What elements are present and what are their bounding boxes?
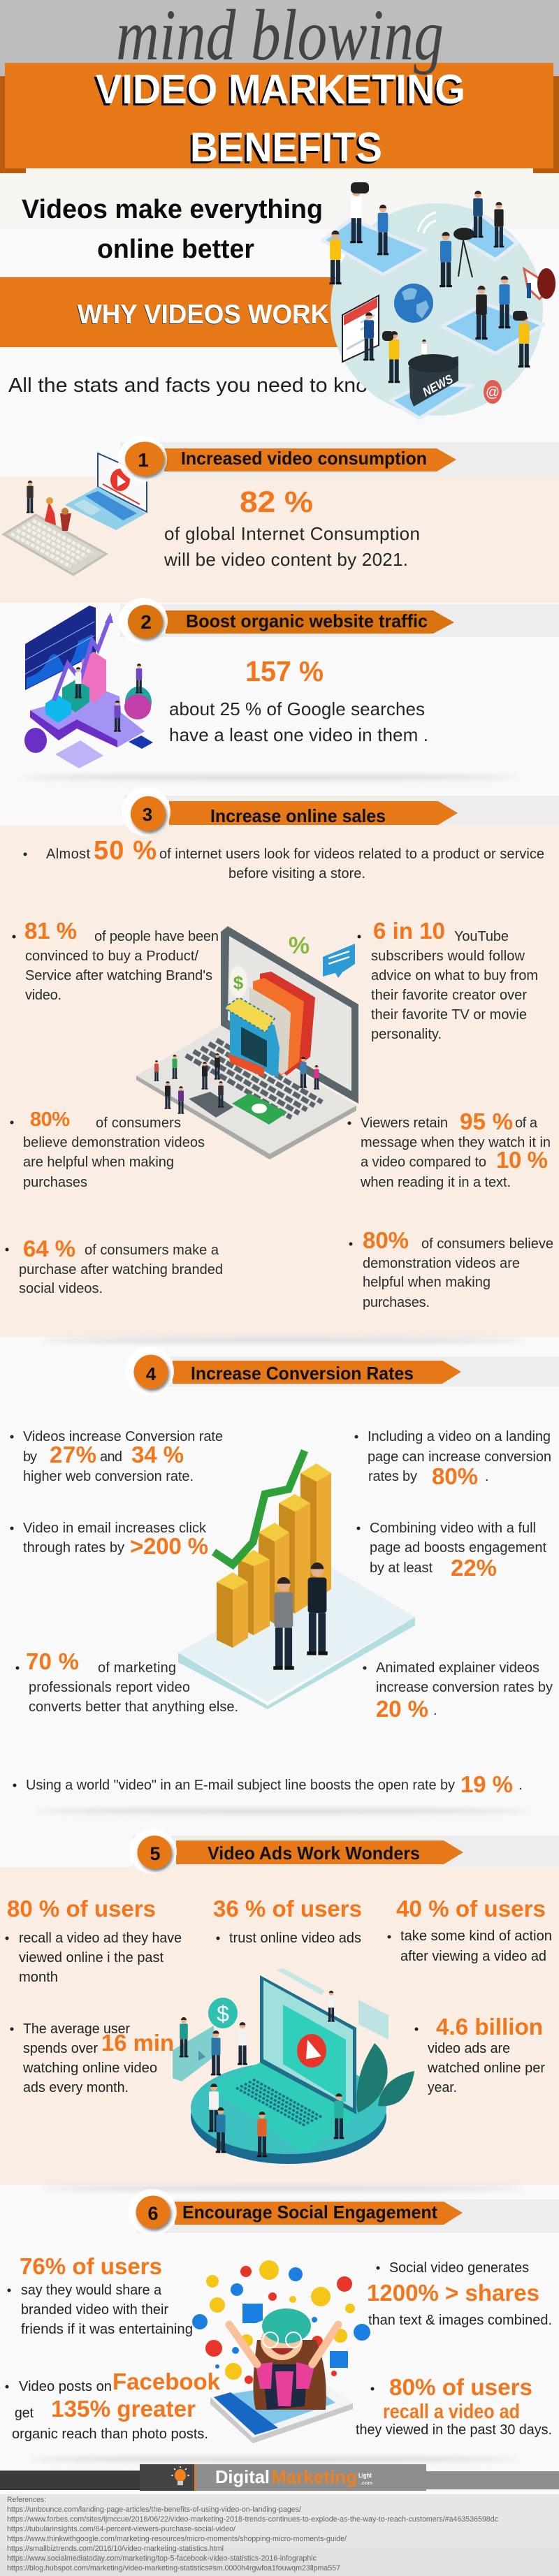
text: 16 min: watching online video (22, 2061, 157, 2076)
logo wordmark: Digital (215, 2466, 270, 2487)
text left column: >200 % (130, 1533, 208, 1559)
panel: section 3 online sales (0, 787, 559, 1342)
text: 95 percent: message when they watch it in (361, 1135, 551, 1150)
logo wordmark: Light (358, 2472, 372, 2479)
shoppers (154, 1053, 319, 1114)
tablets (323, 213, 544, 418)
stat columns: viewed online i the past (19, 1950, 164, 1966)
text: 80 percent left: purchases (23, 1175, 87, 1190)
icon: at sign (484, 380, 502, 404)
main title: BENEFITS (188, 126, 380, 173)
text left column: and (100, 1449, 122, 1465)
references: https://www.thinkwithgoogle.com/marketing-resources/micro-moments/shopping-micro-moments-guide/ (7, 2535, 347, 2543)
people (329, 183, 530, 383)
text: 64 percent: social videos. (19, 1281, 103, 1296)
references (0, 2494, 559, 2576)
stat: 82 % (240, 485, 313, 519)
text right column: . (485, 1469, 489, 1484)
icon: megaphone (524, 268, 556, 299)
references: https://www.socialmediatoday.com/marketing/top-5-facebook-video-statistics-2016-infographic (7, 2554, 317, 2563)
text: 6 in 10: subscribers would follow (371, 949, 525, 964)
illustration: news media globe (323, 183, 556, 418)
header banner (0, 0, 559, 229)
icon: play button (297, 2034, 326, 2068)
text: 80 percent left: of consumers (96, 1115, 181, 1131)
main title (94, 66, 465, 173)
section header: Increase Conversion Rates (191, 1363, 414, 1384)
text: 19 percent: 19 % (460, 1771, 513, 1797)
text: 20 percent: 20 % (376, 1696, 428, 1722)
section header (122, 787, 458, 836)
panel: section 2 organic traffic (21, 598, 559, 780)
text left column: higher web conversion rate. (23, 1469, 194, 1484)
text: 4.6 billion: video ads are (428, 2041, 510, 2056)
panel: section 6 social engagement (6, 2189, 559, 2461)
references: https://www.forbes.com/sites/tjmccue/2018/06/22/video-marketing-2018-trends-continues-to-explode-as-the-way-to-reach-customers/#a463536598dc (7, 2515, 498, 2524)
section header (118, 436, 456, 482)
text: 80 percent recall: recall a video ad (383, 2401, 520, 2423)
icon: money (232, 1093, 287, 1125)
text: 50 percent: of internet users look for videos related to a product or service (159, 847, 544, 862)
text: 76 percent: friends if it was entertaining (21, 2322, 193, 2337)
why videos work band: WHY VIDEOS WORK (77, 300, 329, 330)
logo wordmark: .com (361, 2481, 372, 2486)
text: 64 percent: 64 % (23, 1236, 75, 1261)
stat (169, 655, 428, 745)
section header: 4 (146, 1363, 157, 1384)
section header (125, 1347, 461, 1396)
text: 4.6 billion: year. (428, 2080, 457, 2095)
phone (210, 2377, 353, 2443)
subheading (22, 195, 323, 264)
text: 6 in 10: their favorite TV or movie (371, 1007, 527, 1023)
stat: will be video content by 2021. (164, 549, 408, 570)
text: 19 percent: Using a world "video" in an E-mail subject line boosts the open rate by (26, 1778, 455, 1793)
illustration: bar chart with people (178, 1451, 415, 1709)
text left column: by (23, 1449, 37, 1465)
section header: 5 (150, 1843, 161, 1864)
text left column (10, 1429, 223, 1559)
text: 81 percent: Service after watching Brand's (25, 968, 212, 983)
stat columns: after viewing a video ad (400, 1949, 546, 1964)
logo wordmark (215, 2466, 372, 2487)
icon: dollar coin: $ (233, 972, 244, 993)
plant (356, 2043, 414, 2113)
subheading: Videos make everything (22, 195, 323, 224)
stat columns: 36 % of users (213, 1896, 362, 1922)
section header: Boost organic website traffic (186, 610, 428, 631)
text right column (355, 1429, 551, 1581)
text right column: Combining video with a full (370, 1521, 536, 1536)
text right column: page can increase conversion (368, 1449, 551, 1465)
text: 80 percent left: 80% (30, 1108, 70, 1131)
text: Facebook: organic reach than photo posts. (12, 2427, 208, 2442)
text: 1200 percent: Social video generates (389, 2260, 529, 2276)
text: 70 percent (15, 1648, 238, 1715)
stat columns: 40 % of users (396, 1896, 546, 1922)
text: 76 percent: say they would share a (21, 2283, 162, 2298)
text: 20 percent (363, 1660, 553, 1722)
girl (229, 2308, 338, 2410)
news desk: NEWS (420, 372, 455, 400)
text: 16 min: spends over (23, 2041, 98, 2056)
text: 80 percent left: believe demonstration videos (23, 1135, 205, 1150)
section header: Encourage Social Engagement (182, 2202, 437, 2223)
text left column: 34 % (131, 1442, 184, 1468)
text: 80 percent right: purchases. (363, 1295, 430, 1310)
section header: Increased video consumption (181, 448, 427, 469)
text left column: Videos increase Conversion rate (23, 1429, 223, 1444)
section header: 6 (147, 2203, 159, 2224)
text: 80 percent recall: 80% of users (389, 2374, 532, 2400)
text: 16 min: ads every month. (23, 2080, 129, 2095)
text: 64 percent (6, 1236, 223, 1296)
illustration: girl with social reactions (192, 2260, 370, 2443)
text: 19 percent: . (518, 1778, 523, 1793)
section header: 2 (140, 611, 152, 633)
text: 80 percent recall (356, 2374, 552, 2438)
text right column: 80% (432, 1463, 478, 1489)
text: 20 percent: . (433, 1703, 437, 1718)
icon: at sign: @ (486, 385, 500, 400)
text right column: 22% (451, 1555, 497, 1581)
text: 6 in 10: their favorite creator over (371, 988, 527, 1003)
logo wordmark: Marketing (271, 2466, 357, 2487)
text: 76 percent: 76% of users (20, 2253, 162, 2279)
references: https://tubularinsights.com/64-percent-viewers-purchase-social-video/ (7, 2525, 236, 2533)
stat columns: month (19, 1970, 58, 1985)
stat (164, 485, 420, 570)
references: https://smallbiztrends.com/2016/10/video-marketing-statistics.html (7, 2545, 224, 2553)
tagline: All the stats and facts you need to know (8, 374, 384, 397)
why videos work band: WHY VIDEOS WORK (78, 300, 329, 330)
text: Facebook: Video posts on (19, 2379, 112, 2394)
text left column: Video in email increases click (23, 1521, 207, 1536)
main title: VIDEO MARKETING (94, 68, 463, 115)
main title: BENEFITS (190, 124, 382, 170)
text: 6 in 10: personality. (371, 1027, 442, 1042)
text: 16 min: 16 min (101, 2030, 174, 2056)
text: 76 percent (7, 2253, 193, 2337)
icon: dollar circle: $ (217, 2001, 229, 2026)
green trend arrow (214, 1451, 305, 1565)
illustration: purple growth chart (24, 606, 153, 768)
text: 81 percent: convinced to buy a Product/ (25, 949, 198, 964)
text: 20 percent: Animated explainer videos (376, 1660, 539, 1676)
text: 76 percent: branded video with their (21, 2302, 168, 2318)
illustration: teal laptop (173, 1968, 414, 2164)
books and shop (224, 972, 315, 1078)
text: 6 in 10: advice on what to buy from (371, 968, 538, 983)
stat columns: trust online video ads (229, 1931, 361, 1946)
stat: have a least one video in them . (169, 724, 428, 745)
text right column: Including a video on a landing (368, 1429, 551, 1444)
text: 70 percent: 70 % (26, 1648, 79, 1674)
icon: dollar coin (229, 966, 247, 998)
section header: Increase online sales (210, 805, 386, 826)
text: 81 percent: video. (25, 988, 61, 1003)
text right column: rates by (368, 1469, 417, 1484)
people (180, 1991, 344, 2157)
main title: VIDEO MARKETING (96, 66, 465, 112)
text: 4.6 billion (415, 2014, 545, 2095)
text: 64 percent: purchase after watching branded (19, 1262, 223, 1278)
text: 1200 percent: than text & images combined. (368, 2313, 552, 2328)
text: 6 in 10: 6 in 10 (373, 918, 445, 944)
text: 6 in 10: YouTube (454, 929, 509, 944)
text: Facebook: get (15, 2406, 34, 2421)
stat columns: 80 % of users (7, 1896, 156, 1922)
stat columns: recall a video ad they have (19, 1931, 182, 1946)
text: 95 percent: 95 % (460, 1108, 513, 1134)
text: 19 percent (13, 1771, 523, 1797)
video cards (173, 2000, 389, 2081)
references: https://blog.hubspot.com/marketing/video-marketing-statistics#sm.0000h4rgwfoa1fouwqm23llpma557 (7, 2564, 340, 2573)
text: 4.6 billion: 4.6 billion (436, 2014, 543, 2040)
subheading: online better (97, 235, 254, 264)
text: 50 percent: before visiting a store. (228, 866, 365, 881)
icon: dollar circle (208, 1998, 238, 2028)
stat columns: take some kind of action (400, 1929, 552, 1944)
text right column: page ad boosts engagement (370, 1540, 546, 1556)
text: 95 percent: Viewers retain (361, 1115, 448, 1131)
text: 50 percent: 50 % (94, 836, 157, 865)
text: 80 percent left (10, 1108, 205, 1190)
businesspeople (273, 1577, 294, 1670)
section header (129, 1829, 463, 1874)
text: 81 percent: of people have been (94, 929, 219, 944)
illustration: laptop and keyboard (3, 453, 147, 575)
text: 80 percent left: are helpful when making (23, 1155, 174, 1170)
panel: section 1 video consumption (0, 436, 559, 603)
text: 95 percent: of a (515, 1115, 538, 1131)
text left column: 27% (50, 1442, 96, 1468)
icon: light bulb (171, 2466, 189, 2485)
text: 80 percent right: 80% (363, 1227, 409, 1253)
text: 50 percent: Almost (46, 847, 90, 862)
icon: wifi (418, 212, 436, 233)
text: 70 percent: professionals report video (29, 1680, 190, 1695)
text: 4.6 billion: watched online per (427, 2061, 545, 2076)
text: 20 percent: increase conversion rates by (376, 1680, 553, 1695)
stat: of global Internet Consumption (164, 523, 420, 544)
text: 95 percent (348, 1108, 551, 1190)
text: Facebook (6, 2369, 221, 2442)
text: 80 percent right: of consumers believe (421, 1236, 553, 1252)
text: 80 percent right: helpful when making (363, 1275, 491, 1290)
text: 50 percent (24, 836, 544, 881)
icon: percent tag: % (289, 932, 310, 959)
text: 70 percent: of marketing (98, 1660, 176, 1676)
section header: 3 (143, 804, 152, 825)
newspaper (342, 295, 379, 362)
panel: section 5 video ads (0, 1829, 559, 2190)
text: 95 percent: a video compared to (361, 1155, 486, 1170)
text: 81 percent (13, 918, 219, 1003)
stat columns (6, 1896, 552, 1985)
reaction icons (206, 2260, 355, 2380)
text: 81 percent: 81 % (24, 918, 77, 944)
panel: section 4 conversion rates (10, 1347, 559, 1813)
icon: globe (394, 284, 433, 323)
text: 80 percent right: demonstration videos are (363, 1256, 520, 1271)
text: 80 percent recall: they viewed in the past 30 days. (356, 2422, 552, 2438)
bars (217, 1463, 331, 1648)
text: 6 in 10 (358, 918, 538, 1042)
text: 70 percent: converts better that anything else. (29, 1699, 238, 1715)
text: Facebook: Facebook (112, 2369, 221, 2394)
icon: chat bubble (323, 944, 355, 978)
text: 80 percent right (349, 1227, 553, 1310)
text left column: through rates by (23, 1540, 124, 1556)
why videos work band (0, 277, 342, 347)
text: 95 percent: when reading it in a text. (360, 1175, 511, 1190)
text: Facebook: 135% greater (51, 2396, 196, 2422)
illustration: laptop storefront (136, 926, 358, 1159)
references: References: (7, 2496, 46, 2504)
stat: 157 % (245, 655, 324, 687)
text: 95 percent: 10 % (496, 1147, 548, 1173)
text: 1200 percent: 1200% > shares (367, 2280, 539, 2306)
section header (128, 2189, 463, 2235)
footer logo bar (0, 2464, 559, 2491)
text: 64 percent: of consumers make a (85, 1243, 219, 1258)
text: 1200 percent (367, 2260, 552, 2328)
intro text and band (0, 195, 384, 397)
references: https://unbounce.com/landing-page-articles/the-benefits-of-using-video-on-landing-pages/ (7, 2505, 302, 2514)
section header (119, 598, 454, 644)
section header: 1 (138, 449, 149, 471)
text right column: by at least (370, 1560, 433, 1576)
section header: Video Ads Work Wonders (208, 1843, 420, 1864)
news desk (408, 354, 458, 407)
stat: about 25 % of Google searches (169, 698, 425, 719)
text: 16 min (10, 2021, 174, 2095)
text: 16 min: The average user (23, 2021, 130, 2037)
